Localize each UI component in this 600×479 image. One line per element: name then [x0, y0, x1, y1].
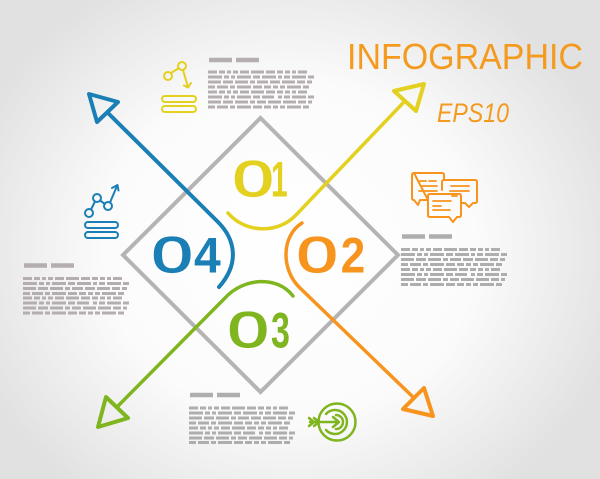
arrow 02: orange [286, 223, 433, 416]
icon: green target with arrow [309, 404, 356, 440]
icon: orange speech bubbles [412, 173, 477, 222]
number 01: 1 [271, 152, 288, 207]
number 04 [152, 227, 221, 284]
arrow 03: green [98, 282, 293, 427]
text block: right [401, 236, 507, 284]
subtitle: EPS10 [437, 98, 509, 128]
arrow 01: yellow [228, 84, 424, 229]
number 04: 0 [152, 227, 193, 283]
number 03: 3 [271, 303, 290, 359]
number 04: 4 [194, 229, 221, 284]
icon: blue line chart [85, 185, 118, 238]
text block: bottom [189, 395, 295, 442]
text block: top [208, 60, 314, 107]
number 03: 0 [228, 302, 269, 358]
number 02: 2 [341, 227, 365, 283]
number 01: 0 [233, 151, 274, 207]
central diamond frame [123, 118, 398, 392]
number 03 [228, 302, 290, 359]
title: INFOGRAPHIC [347, 36, 583, 77]
icon: yellow nodes with arrow [162, 62, 196, 112]
number 02: 0 [297, 227, 338, 283]
number 02 [297, 227, 365, 283]
arrow 04: blue [89, 94, 233, 287]
text block: left [23, 266, 129, 313]
